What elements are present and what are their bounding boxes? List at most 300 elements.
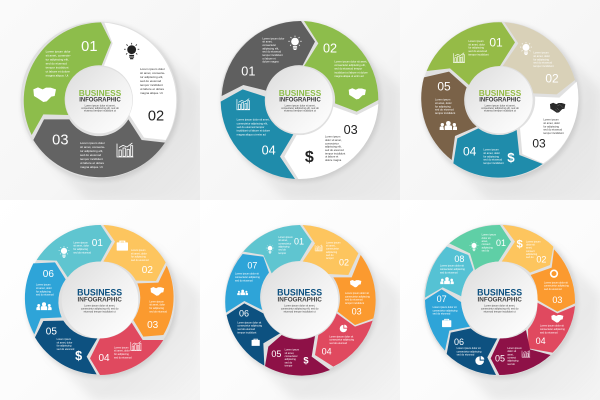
text block 01: sed do eiusmod <box>262 50 282 54</box>
segment 02 <box>104 23 176 140</box>
number 01: 01 <box>81 39 97 55</box>
number 01: 01 <box>489 36 503 50</box>
text block 03: sed do eiusmod <box>543 128 563 132</box>
text block 01: Lorem ipsum <box>278 236 293 239</box>
text block 03: Lorem ipsum <box>543 118 559 122</box>
panel: four step cycle <box>200 0 400 200</box>
text block 01: sed do <box>482 250 490 252</box>
text block 02: dolor sit <box>526 244 535 247</box>
text block 02: Lorem ipsum dolor sit amet, <box>334 59 367 63</box>
center title: BUSINESS <box>79 88 122 98</box>
text block 07: Lorem ipsum dolor sit <box>433 306 457 309</box>
text block 02: tempor <box>326 257 334 260</box>
text block 04: Lorem ipsum dolor sit amet, <box>237 118 270 122</box>
center circle <box>461 262 538 338</box>
icon: light bulb <box>470 242 478 251</box>
number 04: 04 <box>463 144 477 158</box>
text block 01: sit amet, dolor <box>468 42 485 46</box>
icon: briefcase <box>117 241 128 251</box>
number 02: 02 <box>339 258 349 268</box>
text block 05: adipiscing <box>285 358 296 361</box>
center title: consectetur adipiscing elit, sed do <box>281 308 319 311</box>
text block 01: sit amet, dolor <box>73 245 89 248</box>
text block 03: tempor incididunt <box>543 131 564 135</box>
text block 05: sit amet, dolor <box>57 341 73 344</box>
icon: dollar: $ <box>305 149 314 166</box>
center circle <box>266 67 333 133</box>
text block 02: sed do eiusmod tempor <box>334 67 362 71</box>
segment 01 <box>243 225 312 273</box>
center title: INFOGRAPHIC <box>478 297 522 304</box>
number 06: 06 <box>43 269 54 280</box>
number 02: 02 <box>142 265 153 276</box>
number 02: 02 <box>545 72 559 86</box>
number 04: 04 <box>262 144 276 158</box>
text block 04: sed do eiusmod <box>114 356 132 359</box>
text block 02: tur adipiscing elit, <box>140 75 163 79</box>
center title: consectetur adipiscing elit, sed do <box>481 308 519 311</box>
text block 01: dolore magna <box>262 60 279 64</box>
panel: five step cycle <box>400 0 600 200</box>
center title: Lorem ipsum dolor sit amet, <box>485 104 516 107</box>
text block 02: magna aliqua ut enim ad <box>334 74 364 78</box>
icon: ring <box>551 270 557 277</box>
segment 05 <box>35 321 97 374</box>
text block 02: consect <box>526 250 535 253</box>
icon: handshake <box>151 287 164 296</box>
number 04: 04 <box>536 336 546 346</box>
text block 05: for adipiscing <box>435 104 451 108</box>
text block 05: Lorem ipsum <box>57 338 71 341</box>
center title: eiusmod tempor incididunt ut <box>284 311 316 314</box>
icon: pie chart <box>340 325 347 332</box>
icon: dollar: $ <box>75 349 82 363</box>
center title: INFOGRAPHIC <box>79 98 121 104</box>
text block 01: tempor incididunt <box>262 53 283 57</box>
text block 05: Lorem ipsum <box>435 98 451 102</box>
text block 01: consect <box>482 243 491 246</box>
segment 07 <box>425 289 470 351</box>
text block 06: sed do eiusmod <box>36 294 54 297</box>
text block 01: tempor incididunt <box>468 52 489 56</box>
number 08: 08 <box>454 254 464 264</box>
text block 06: sed do eiusmod <box>237 328 256 331</box>
text block 03: sit amet, consecte- <box>80 145 105 149</box>
text block 07: consectetur adipiscing <box>235 276 260 279</box>
segment 07 <box>225 254 269 313</box>
text block 04: consectetur adipiscing <box>540 328 565 331</box>
text block 05: Lorem ipsum <box>285 349 299 352</box>
text block 04: for adipiscing <box>483 154 500 158</box>
center title: consectetur adipiscing elit, sed do <box>481 107 519 110</box>
text block 03: ut labore et <box>325 155 339 159</box>
segment 05 <box>265 335 330 376</box>
text block 06: sit amet, dolor <box>36 287 52 290</box>
text block 01: adipiscing <box>482 246 493 249</box>
text block 01: sed do eiusmod <box>73 251 92 254</box>
segment 03 <box>33 119 165 177</box>
text block 04: consectetur adipiscing elit, <box>237 121 268 125</box>
number 01: 01 <box>496 238 506 248</box>
number 03: 03 <box>532 137 546 151</box>
segment 04 <box>453 128 543 178</box>
segment 02 <box>303 225 358 275</box>
text block 04: Lorem ipsum dolor sit <box>540 325 564 328</box>
icon: people <box>36 302 52 310</box>
number 06: 06 <box>454 337 464 347</box>
text block 03: tempor incididunt <box>345 302 364 305</box>
number 03: 03 <box>52 132 68 148</box>
text block 03: sed do eiusmod <box>544 288 562 291</box>
text block 01: sed do <box>278 249 286 252</box>
text block 02: Lorem ipsum <box>533 51 549 55</box>
icon: people <box>440 277 454 284</box>
segment 06 <box>25 262 66 334</box>
text block 04: sed do eiusmod tempor <box>237 125 265 129</box>
center title: consectetur adipiscing elit, sed do <box>81 107 119 110</box>
center title: INFOGRAPHIC <box>279 98 321 104</box>
center circle <box>62 262 138 338</box>
center title: Lorem ipsum dolor sit amet, <box>85 104 116 107</box>
text block 01: Lorem ipsum dolor <box>46 50 71 54</box>
text block 02: Lorem ipsum <box>326 241 340 244</box>
center title: BUSINESS <box>479 88 522 98</box>
text block 01: for adipiscing <box>73 248 89 251</box>
text block 02: sed do eiusmod <box>131 259 149 262</box>
text block 05: sed do <box>507 363 515 366</box>
text block 02: sed do eiusmod <box>533 61 553 65</box>
text block 01: tempor <box>278 252 286 255</box>
text block 05: sed do <box>285 361 293 364</box>
text block 02: amet, <box>526 247 533 250</box>
icon: briefcase <box>442 319 451 327</box>
text block 03: Lorem ipsum dolor <box>80 141 105 145</box>
text block 04: tempor incididunt <box>483 161 504 165</box>
text block 08: consectetur adipiscing <box>440 268 465 271</box>
text block 04: consectetur adipiscing <box>329 339 355 342</box>
text block 04: Lorem ipsum dolor sit <box>329 335 354 338</box>
panel: seven step cycle <box>224 224 400 400</box>
segment 01 <box>222 21 315 96</box>
segment 01 <box>37 225 112 277</box>
text block 01: sit amet, <box>278 239 288 242</box>
text block 06: consectetur adipiscing <box>237 325 263 328</box>
text block 03: Lorem ipsum <box>325 135 341 139</box>
text block 01: Lorem ipsum <box>468 39 484 43</box>
text block 02: sit amet, consecte- <box>140 71 165 75</box>
center title: INFOGRAPHIC <box>278 297 322 304</box>
center title: eiusmod tempor incididunt ut <box>484 311 516 314</box>
number 05: 05 <box>271 349 281 359</box>
center title: eiusmod tempor incididunt ut <box>484 110 516 113</box>
text block 06: consectetur adipiscing <box>457 350 482 353</box>
text block 08: sed do eiusmod <box>440 271 458 274</box>
text block 08: Lorem ipsum dolor sit <box>440 265 464 268</box>
number 07: 07 <box>247 260 257 270</box>
text block 01: consectetur <box>278 242 291 245</box>
number 03: 03 <box>147 320 159 331</box>
panel: three step cycle <box>0 0 200 200</box>
segment 03 <box>531 249 575 312</box>
text block 01: adipiscing elit, <box>262 46 279 50</box>
text block 03: for adipiscing <box>543 124 560 128</box>
center title: INFOGRAPHIC <box>479 98 521 104</box>
text block 02: for adipiscing <box>131 256 146 259</box>
text block 01: tempor incididunt <box>46 66 69 70</box>
text block 01: tur adipiscing elit, <box>46 58 69 62</box>
text block 02: magna aliqua. Ut <box>140 91 163 95</box>
text block 05: Lorem ipsum <box>507 347 522 350</box>
segment 03 <box>333 255 376 325</box>
center title: eiusmod tempor incididunt ut <box>284 110 316 113</box>
text block 03: Lorem ipsum dolor sit <box>345 292 369 295</box>
text block 03: dolor sit amet, <box>325 138 342 142</box>
text block 04: sit amet, dolor <box>114 350 130 353</box>
segment 04 <box>221 89 295 179</box>
icon: people <box>237 290 248 295</box>
text block 01: Lorem ipsum dolor <box>262 36 284 40</box>
text block 01: sit amet, <box>262 40 273 44</box>
icon: light bulb <box>288 36 302 50</box>
text block 04: incididunt ut labore et dolore <box>237 129 271 133</box>
number 04: 04 <box>322 346 332 356</box>
text block 04: sed do eiusmod <box>483 158 503 162</box>
text block 03: Lorem ipsum dolor sit <box>544 281 568 284</box>
segment 05 <box>421 72 477 160</box>
text block 01: sed do eiusmod <box>46 62 67 66</box>
text block 04: sit amet, dolor <box>483 151 500 155</box>
segment 04 <box>315 313 373 367</box>
center circle <box>262 262 338 338</box>
center title <box>479 88 522 113</box>
icon: dollar: $ <box>507 150 515 165</box>
segment 04 <box>90 323 163 375</box>
text block 05: sit amet, dolor <box>435 101 452 105</box>
center title: consectetur adipiscing elit, sed do <box>81 308 119 311</box>
center title: Lorem ipsum dolor sit amet, <box>84 305 115 308</box>
text block 05: consectetur <box>285 355 298 358</box>
icon: light bulb <box>520 42 532 55</box>
center title <box>477 288 522 314</box>
number 07: 07 <box>437 294 447 304</box>
text block 01: ut labore et <box>262 56 276 60</box>
icon: pie chart <box>475 356 484 365</box>
icon: handshake <box>550 103 565 113</box>
number 03: 03 <box>344 123 358 137</box>
number 02: 02 <box>536 255 546 265</box>
segment 06 <box>227 303 280 366</box>
center title: BUSINESS <box>279 88 322 98</box>
segment 01 <box>427 22 515 85</box>
center title: Lorem ipsum dolor sit amet, <box>484 305 515 308</box>
center title <box>77 288 122 314</box>
text block 05: sed do eiusmod <box>435 108 454 112</box>
text block 03: tempor incididunt <box>80 157 103 161</box>
text block 04: Lorem ipsum <box>114 346 128 349</box>
number 06: 06 <box>239 309 249 319</box>
icon: bar chart <box>522 350 530 357</box>
icon: people <box>440 121 457 130</box>
center title: INFOGRAPHIC <box>78 297 122 304</box>
number 03: 03 <box>552 295 562 305</box>
text block 02: sit amet, dolor <box>533 54 550 58</box>
icon: light bulb <box>124 43 139 59</box>
text block 03: adipiscing elit, <box>325 145 342 149</box>
text block 07: sed do eiusmod <box>235 279 253 282</box>
text block 03: consectetur <box>325 141 339 145</box>
text block 05: for adipiscing <box>57 345 72 348</box>
text block 05: adipiscing <box>507 360 519 363</box>
text block 03: sed do eiusmod <box>80 153 102 157</box>
center title: Lorem ipsum dolor sit amet, <box>284 305 315 308</box>
text block 01: for adipiscing <box>468 46 485 50</box>
text block 03: magna aliqua. Ut <box>80 165 103 169</box>
text block 02: Lorem ipsum dolor <box>140 67 165 71</box>
text block 05: tempor incididunt <box>435 111 455 115</box>
segment 04 <box>528 303 575 353</box>
icon: dollar: $ <box>303 355 309 365</box>
text block 01: adipiscing <box>278 246 290 248</box>
segment 01 <box>24 22 111 135</box>
text block 04: sed do eiusmod <box>329 342 348 345</box>
center title: eiusmod tempor incididunt ut <box>84 110 116 113</box>
number 04: 04 <box>98 353 110 364</box>
text block 02: sed do <box>526 256 534 259</box>
text block 07: consectetur adipiscing <box>433 309 458 312</box>
text block 03: consectetur adipiscing <box>345 295 370 298</box>
text block 07: Lorem ipsum dolor sit <box>235 273 259 276</box>
text block 02: adipiscing <box>326 251 338 254</box>
text block 06: Lorem ipsum dolor sit <box>457 347 481 350</box>
text block 02: consectetur <box>326 248 339 251</box>
number 02: 02 <box>148 108 164 124</box>
segment 03 <box>284 104 378 179</box>
text block 01: amet, <box>482 240 488 243</box>
text block 01: dolor sit <box>482 237 491 240</box>
icon: handshake <box>33 87 56 102</box>
icon: briefcase <box>252 339 260 346</box>
segment 02 <box>304 21 378 112</box>
text block 02: ut labore et dolore <box>140 87 165 91</box>
text block 04: sed do eiusmod <box>540 331 558 334</box>
text block 04: magna aliqua ut enim ad <box>237 132 266 136</box>
icon: dollar: $ <box>517 238 524 250</box>
icon: bar chart <box>453 53 465 63</box>
text block 03: consectetur adipiscing <box>544 285 569 288</box>
text block 01: Lorem ipsum <box>73 241 88 244</box>
icon: light bulb <box>266 245 274 253</box>
text block 03: tempor incididunt <box>325 151 345 155</box>
center title <box>279 88 322 113</box>
center title: BUSINESS <box>77 288 122 298</box>
center title: Lorem ipsum dolor sit amet, <box>285 104 316 107</box>
number 01: 01 <box>92 238 103 249</box>
text block 06: Lorem ipsum <box>36 284 50 287</box>
segment 02 <box>503 22 575 94</box>
icon: bar chart <box>131 341 141 351</box>
icon: handshake <box>350 280 361 287</box>
text block 02: sit amet, <box>326 245 336 248</box>
text block 04: Lorem ipsum <box>483 148 499 152</box>
text block 02: incididunt ut labore et dolore <box>334 70 368 74</box>
segment 06 <box>447 328 497 375</box>
text block 06: Lorem ipsum dolor sit <box>237 321 262 324</box>
center title: BUSINESS <box>277 288 322 298</box>
icon: light bulb <box>59 246 69 258</box>
text block 06: tempor incididunt <box>237 331 257 334</box>
center title: BUSINESS <box>477 288 522 298</box>
text block 05: tempor <box>285 364 293 368</box>
panel: six step cycle <box>24 224 200 400</box>
icon: bar chart <box>237 99 250 110</box>
number 03: 03 <box>352 306 362 316</box>
number 02: 02 <box>323 42 337 56</box>
text block 02: sed do <box>326 254 334 257</box>
text block 01: sed do eiusmod <box>468 49 488 53</box>
text block 05: amet, <box>507 353 514 356</box>
text block 06: sed do eiusmod <box>457 354 475 357</box>
center title <box>79 88 122 113</box>
segment 05 <box>491 330 551 375</box>
segment 02 <box>502 225 553 273</box>
text block 02: sed do eiusmod <box>140 79 162 83</box>
text block 02: for adipiscing <box>533 57 550 61</box>
text block 05: sit amet, <box>285 352 294 355</box>
text block 02: Lorem ipsum <box>131 249 145 252</box>
segment 08 <box>425 247 473 298</box>
text block 06: for adipiscing <box>36 290 51 293</box>
text block 01: ut labore et dolore <box>46 70 70 74</box>
icon: handshake <box>349 88 366 99</box>
text block 02: tempor incididunt <box>533 64 554 68</box>
center circle <box>66 67 132 133</box>
icon: bar chart <box>117 143 133 157</box>
icon: bar chart <box>315 245 322 251</box>
text block 01: sit amet, consecte- <box>46 54 71 58</box>
number 05: 05 <box>46 326 57 337</box>
text block 05: dolor sit <box>507 350 516 353</box>
center title: consectetur adipiscing elit, sed do <box>281 107 319 110</box>
text block 01: Lorem ipsum <box>482 234 496 237</box>
text block 03: ut labore et dolore <box>80 161 105 165</box>
number 05: 05 <box>495 354 505 364</box>
text block 03: sit amet, dolor <box>149 304 165 307</box>
text block 07: sed do eiusmod <box>433 313 451 316</box>
text block 02: tempor incididunt <box>140 83 163 87</box>
text block 03: dolore magna <box>325 158 342 162</box>
icon: handshake <box>551 315 563 323</box>
text block 05: consect <box>507 356 516 360</box>
segment 02 <box>103 225 166 281</box>
segment 03 <box>520 82 578 163</box>
text block 03: sed do eiusmod <box>325 148 344 152</box>
text block 02: sit amet, dolor <box>131 252 147 255</box>
segment 03 <box>133 266 174 337</box>
panel: eight step cycle <box>423 224 600 400</box>
text block 02: adipiscing <box>526 253 538 256</box>
center title <box>277 288 322 314</box>
segment 01 <box>449 225 511 270</box>
number 01: 01 <box>241 64 255 78</box>
text block 04: for adipiscing <box>114 353 129 356</box>
text block 03: sed do eiusmod <box>345 299 363 302</box>
text block 03: for adipiscing <box>149 307 165 310</box>
text block 01: magna aliqua. Ut <box>46 74 69 78</box>
text block 02: consectetur adipiscing elit, <box>334 63 366 67</box>
center circle <box>466 67 533 133</box>
text block 01: consectetur <box>262 43 276 47</box>
text block 03: sed do eiusmod <box>149 310 168 313</box>
